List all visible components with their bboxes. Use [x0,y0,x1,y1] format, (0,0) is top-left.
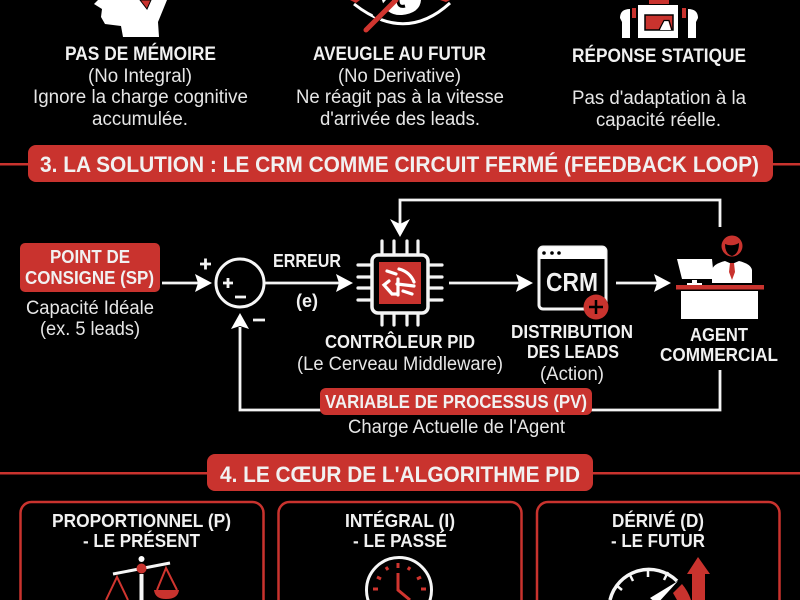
arrow: CRM to agent [616,274,671,292]
text: lead distribution: DISTRIBUTION [511,321,633,342]
panel title [345,510,455,551]
text block: no memory: Ignore la charge cognitive [33,87,248,108]
text block: blind to the future: AVEUGLE AU FUTUR [313,44,486,65]
text: lead distribution: (Action) [540,364,604,385]
text: sales agent [660,324,778,365]
panel title: DÉRIVÉ (D) [612,510,704,531]
box: set point: POINT DE [50,246,130,267]
text: PID controller: (Le Cerveau Middleware) [297,354,503,375]
icon: CRM window: CRM [546,269,598,297]
panel title: PROPORTIONNEL (P) [52,510,231,531]
icon: PID chip [358,241,442,325]
text: lead distribution: DES LEADS [527,341,619,362]
text block: static response [572,45,746,131]
panel: integral [278,502,522,600]
panel title [52,510,231,551]
panel title: INTÉGRAL (I) [345,510,455,531]
text block: static response: RÉPONSE STATIQUE [572,45,746,67]
text: error label [273,250,341,311]
icon: scales [106,556,179,600]
text: ideal capacity: (ex. 5 leads) [40,319,140,340]
text: current agent load: Charge Actuelle de l'Agent [348,417,566,438]
text block: no memory [33,43,248,130]
icon: crossed-out eye [350,0,450,30]
text block: no memory: (No Integral) [88,66,192,87]
text block: blind to the future: (No Derivative) [338,66,461,87]
heading: section 3: 3. LA SOLUTION : LE CRM COMME CIRCUIT FERMÉ (FEEDBACK LOOP) [40,152,759,177]
text block: blind to the future [296,44,504,130]
heading: section 3 [0,145,800,182]
icon: clock [366,558,432,600]
arrow: bottom feedback path [231,313,720,410]
panel: problems with static distribution [33,0,746,131]
panel title: - LE PRÉSENT [83,530,201,551]
heading: section 4: 4. LE CŒUR DE L'ALGORITHME PID [220,462,580,487]
arrow: controller to CRM [449,274,533,292]
text: sales agent: AGENT [690,324,749,345]
text: PID controller: CONTRÔLEUR PID [325,331,475,352]
box: set point: CONSIGNE (SP) [25,267,154,288]
arrow: comparator to controller [265,274,353,292]
panel title [611,510,705,551]
text block: blind to the future: Ne réagit pas à la vitesse [296,87,504,108]
heading: section 4 [0,454,800,491]
text: lead distribution [511,321,633,385]
panel: closed-loop diagram [20,200,778,438]
icon: CRM window [539,247,608,320]
text block: static response: capacité réelle. [596,110,721,131]
text: PID controller [297,331,503,375]
text block: no memory: PAS DE MÉMOIRE [65,43,216,65]
arrow: set point to comparator [162,274,212,292]
text: ideal capacity: Capacité Idéale [26,298,154,319]
icon: comparator [200,258,265,320]
panel title: - LE FUTUR [611,530,705,551]
text: error label: (e) [296,290,318,311]
text block: blind to the future: d'arrivée des leads. [320,109,480,130]
panel: derivative [537,502,780,600]
text block: no memory: accumulée. [92,109,188,130]
box: process variable: VARIABLE DE PROCESSUS (PV) [325,392,587,412]
icon: sales agent at desk [676,236,764,319]
icon: static machine [620,0,698,38]
text block: static response: Pas d'adaptation à la [572,88,746,109]
panel: proportional [20,502,264,600]
text: sales agent: COMMERCIAL [660,344,778,365]
panel title: - LE PASSÉ [353,530,447,551]
text: error label: ERREUR [273,250,341,271]
arrow: top feedback path [390,200,720,237]
icon: head with memory gap [94,0,167,37]
text: ideal capacity [26,298,154,340]
icon: speedometer with rising arrow [610,557,710,600]
box: set point [20,243,160,292]
